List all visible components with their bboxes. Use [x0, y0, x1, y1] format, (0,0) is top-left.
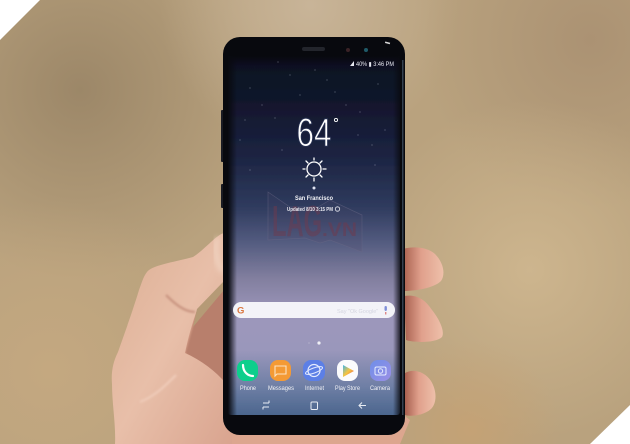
hand: palm and thumb — [112, 233, 410, 444]
location — [287, 186, 340, 213]
watermark: LAG — [272, 197, 322, 246]
watermark: .VN — [322, 220, 357, 241]
app icon row — [237, 360, 391, 392]
page dots — [308, 341, 321, 345]
weather temperature: 64 — [296, 111, 332, 155]
icon: sun — [303, 158, 326, 181]
stars — [240, 62, 386, 170]
app: Internet — [303, 360, 325, 392]
app: Play Store — [335, 360, 360, 392]
location: Updated 8/10 3:15 PM — [287, 207, 333, 213]
app: Play Store: Play Store — [335, 385, 360, 392]
app: Messages — [268, 360, 294, 392]
corner ribbon top-left — [0, 0, 40, 40]
fingers right — [403, 247, 443, 416]
gap between thumb and palm — [193, 281, 224, 327]
phone body — [221, 37, 405, 435]
speaker and sensors — [302, 47, 325, 51]
corner ribbon bottom-right — [590, 405, 630, 444]
app: Camera: Camera — [370, 385, 390, 392]
screen — [228, 56, 400, 415]
google search bar: Say "Ok Google" — [337, 309, 378, 315]
app: Camera — [370, 360, 391, 392]
google search bar: G — [237, 306, 244, 316]
app: Messages: Messages — [268, 385, 294, 392]
navigation bar — [263, 400, 366, 410]
location: San Francisco — [295, 195, 333, 202]
app: Internet: Internet — [305, 385, 324, 392]
app: Phone: Phone — [240, 385, 256, 392]
status bar: 40% ▮ 3:46 PM — [356, 61, 394, 68]
google search bar — [233, 302, 395, 318]
app: Phone — [237, 360, 258, 392]
